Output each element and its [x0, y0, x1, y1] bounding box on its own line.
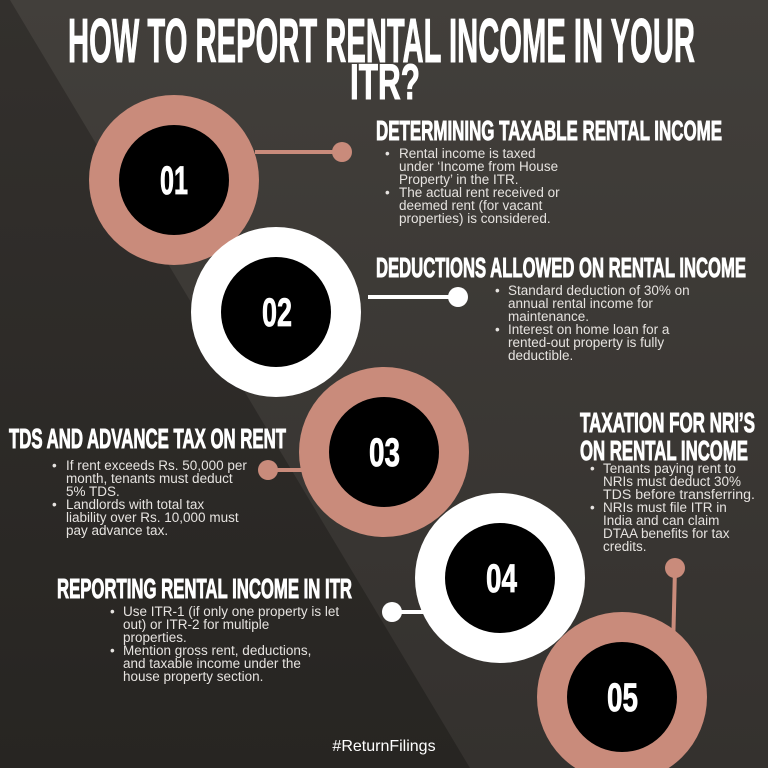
- circle 01: [89, 95, 259, 265]
- section 04: credits.: [603, 539, 647, 554]
- section 03: Landlords with total tax: [66, 497, 204, 512]
- section 02: annual rental income for: [508, 296, 653, 311]
- section 02: Standard deduction of 30% on: [508, 283, 690, 298]
- section 01: [376, 115, 722, 226]
- section 02: rented-out property is fully: [508, 335, 664, 350]
- section 05: •: [110, 604, 115, 619]
- section 05: Use ITR-1 (if only one property is let: [123, 604, 339, 619]
- section 04: DTAA benefits for tax: [603, 526, 730, 541]
- connector 05: [665, 558, 685, 650]
- circle 05: [537, 612, 707, 768]
- connector 04: [382, 602, 430, 622]
- connector 01: [255, 142, 352, 162]
- section 05: properties.: [123, 630, 187, 645]
- section 04: Tenants paying rent to: [603, 461, 736, 476]
- section 03: •: [52, 497, 57, 512]
- section 05: REPORTING RENTAL INCOME IN ITR: [57, 573, 352, 604]
- circle 05: 05: [607, 676, 638, 720]
- section 01: under ‘Income from House: [399, 159, 558, 174]
- section 05: Mention gross rent, deductions,: [123, 643, 311, 658]
- circle 03: [299, 367, 469, 537]
- section 03: If rent exceeds Rs. 50,000 per: [66, 458, 247, 473]
- section 03: month, tenants must deduct: [66, 471, 233, 486]
- section 05: and taxable income under the: [123, 656, 301, 671]
- section 04: •: [590, 500, 595, 515]
- section 03: liability over Rs. 10,000 must: [66, 510, 239, 525]
- section 01: •: [385, 185, 390, 200]
- section 02: Interest on home loan for a: [508, 322, 670, 337]
- section 03: [9, 423, 286, 538]
- section 04: [580, 407, 755, 554]
- section 03: 5% TDS.: [66, 484, 120, 499]
- section 01: Rental income is taxed: [399, 146, 536, 161]
- section 02: •: [495, 322, 500, 337]
- section 04: •: [590, 461, 595, 476]
- section 04: NRIs must deduct 30%: [603, 474, 741, 489]
- circle 02: [191, 227, 361, 397]
- section 05: •: [110, 643, 115, 658]
- section 01: properties) is considered.: [399, 211, 551, 226]
- section 04: India and can claim: [603, 513, 719, 528]
- section 02: maintenance.: [508, 309, 589, 324]
- section 03: pay advance tax.: [66, 523, 168, 538]
- section 05: house property section.: [123, 669, 263, 684]
- section 01: •: [385, 146, 390, 161]
- circle 04: 04: [486, 557, 518, 601]
- circle 01: 01: [160, 159, 188, 203]
- section 04: NRIs must file ITR in: [603, 500, 727, 515]
- section 05: [57, 573, 352, 684]
- connector 02: [368, 287, 468, 307]
- section 04: TDS before transferring.: [603, 487, 755, 502]
- circle 04: [415, 493, 585, 663]
- section 01: deemed rent (for vacant: [399, 198, 543, 213]
- section 01: Property’ in the ITR.: [399, 172, 519, 187]
- section 03: •: [52, 458, 57, 473]
- section 02: deductible.: [508, 348, 573, 363]
- footer hashtag: #ReturnFilings: [332, 738, 436, 755]
- section 02: •: [495, 283, 500, 298]
- section 03: TDS AND ADVANCE TAX ON RENT: [9, 423, 286, 454]
- section 05: out) or ITR-2 for multiple: [123, 617, 269, 632]
- circle 02: 02: [262, 291, 292, 335]
- section 01: The actual rent received or: [399, 185, 560, 200]
- connector 03: [258, 460, 305, 480]
- circle 03: 03: [369, 431, 400, 475]
- title: ITR?: [350, 54, 420, 110]
- title: [68, 7, 695, 110]
- section 02: [376, 252, 746, 363]
